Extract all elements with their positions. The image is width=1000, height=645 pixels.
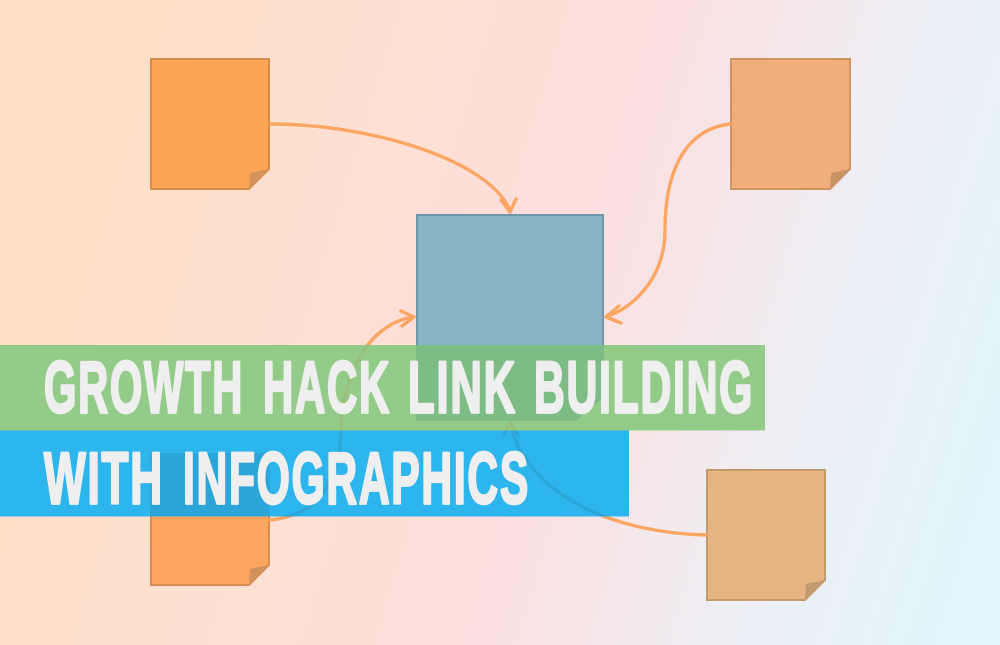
title line 1: LINK	[408, 348, 517, 428]
sticky note: bottom right	[707, 470, 825, 600]
title line 1	[44, 348, 754, 428]
title line 2: WITH	[44, 438, 164, 520]
title line 2: INFOGRAPHICS	[183, 438, 530, 520]
title banner: green	[0, 345, 765, 430]
title line 1: BUILDING	[534, 348, 754, 428]
sticky note: top right	[731, 59, 850, 189]
arrow: bottom left note to centre	[270, 311, 414, 520]
arrow: top left note to centre	[271, 124, 516, 212]
title line 1: GROWTH	[44, 348, 244, 428]
arrow: top right note to centre	[606, 124, 730, 323]
title line 1: HACK	[263, 348, 391, 428]
sticky note: top left	[151, 59, 269, 189]
title line 2	[44, 438, 530, 520]
sticky note: bottom left	[151, 453, 269, 585]
title banner: blue	[0, 430, 629, 516]
arrow: bottom right note to centre	[504, 423, 706, 535]
central blue document	[417, 215, 603, 420]
